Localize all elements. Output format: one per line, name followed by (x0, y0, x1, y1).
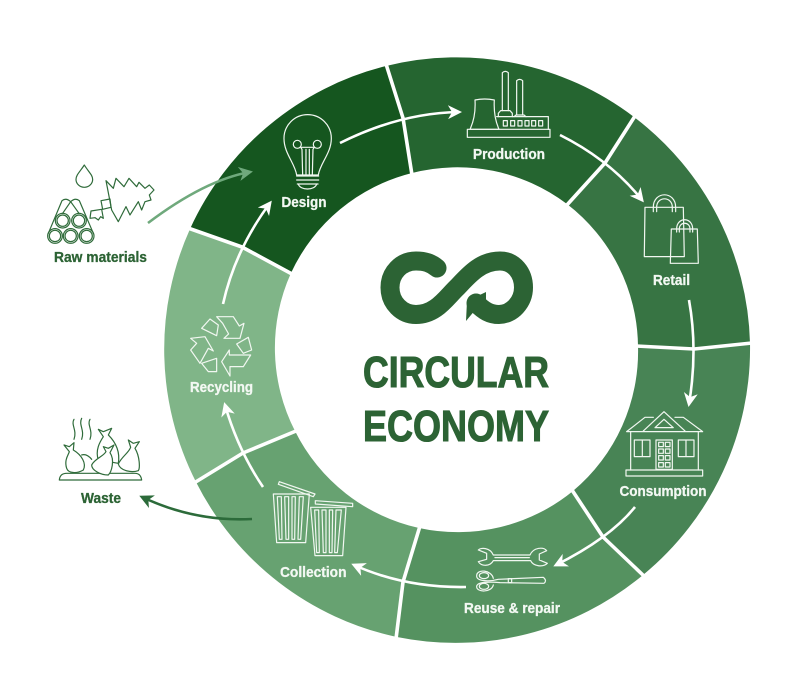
icon: fir tree (90, 178, 154, 222)
arrow: reuse to collection (354, 565, 466, 587)
title: ECONOMY (363, 402, 549, 451)
arrow: retail to consumption (689, 300, 694, 404)
arrow: production to retail (560, 135, 642, 200)
icon: shopping bags (644, 195, 698, 263)
icon: water drop (76, 165, 93, 187)
icon: house (626, 412, 703, 476)
arrow: raw materials to design (148, 172, 250, 223)
arrow: recycling to design (223, 203, 270, 304)
segment: design (190, 66, 412, 273)
label: reuse and repair: Reuse & repair (464, 600, 560, 617)
title: CIRCULAR (363, 348, 549, 397)
icon: factory (467, 71, 550, 137)
icon: wrench and scissors (477, 548, 547, 591)
arrow: consumption to reuse (556, 507, 635, 565)
label: design: Design (282, 194, 326, 211)
segment: retail (567, 117, 750, 349)
arrow: collection to recycling (225, 405, 263, 487)
icon: light bulb (284, 115, 331, 189)
segment: recycling (164, 229, 295, 482)
icon: pipes (48, 199, 94, 243)
icon: infinity loop logo (390, 261, 524, 321)
icon: trash bins (273, 482, 353, 556)
panel: circular ring (164, 57, 750, 643)
segment: collection (196, 431, 419, 637)
arrow: collection to waste (142, 497, 252, 519)
icon: raw materials (48, 165, 154, 243)
label: collection: Collection (280, 564, 346, 581)
label: waste: Waste (81, 490, 121, 507)
label: retail: Retail (653, 272, 690, 289)
icon: waste bags (59, 418, 142, 480)
label: consumption: Consumption (620, 483, 706, 500)
segment: reuse and repair (397, 491, 643, 643)
label: recycling: Recycling (190, 379, 253, 396)
icon: recycling symbol (191, 317, 252, 376)
label: raw materials: Raw materials (54, 249, 147, 266)
title (363, 348, 549, 451)
arrow: design to production (340, 112, 459, 143)
segment: production (386, 57, 634, 204)
label: production: Production (473, 146, 545, 163)
segment: consumption (573, 343, 750, 575)
